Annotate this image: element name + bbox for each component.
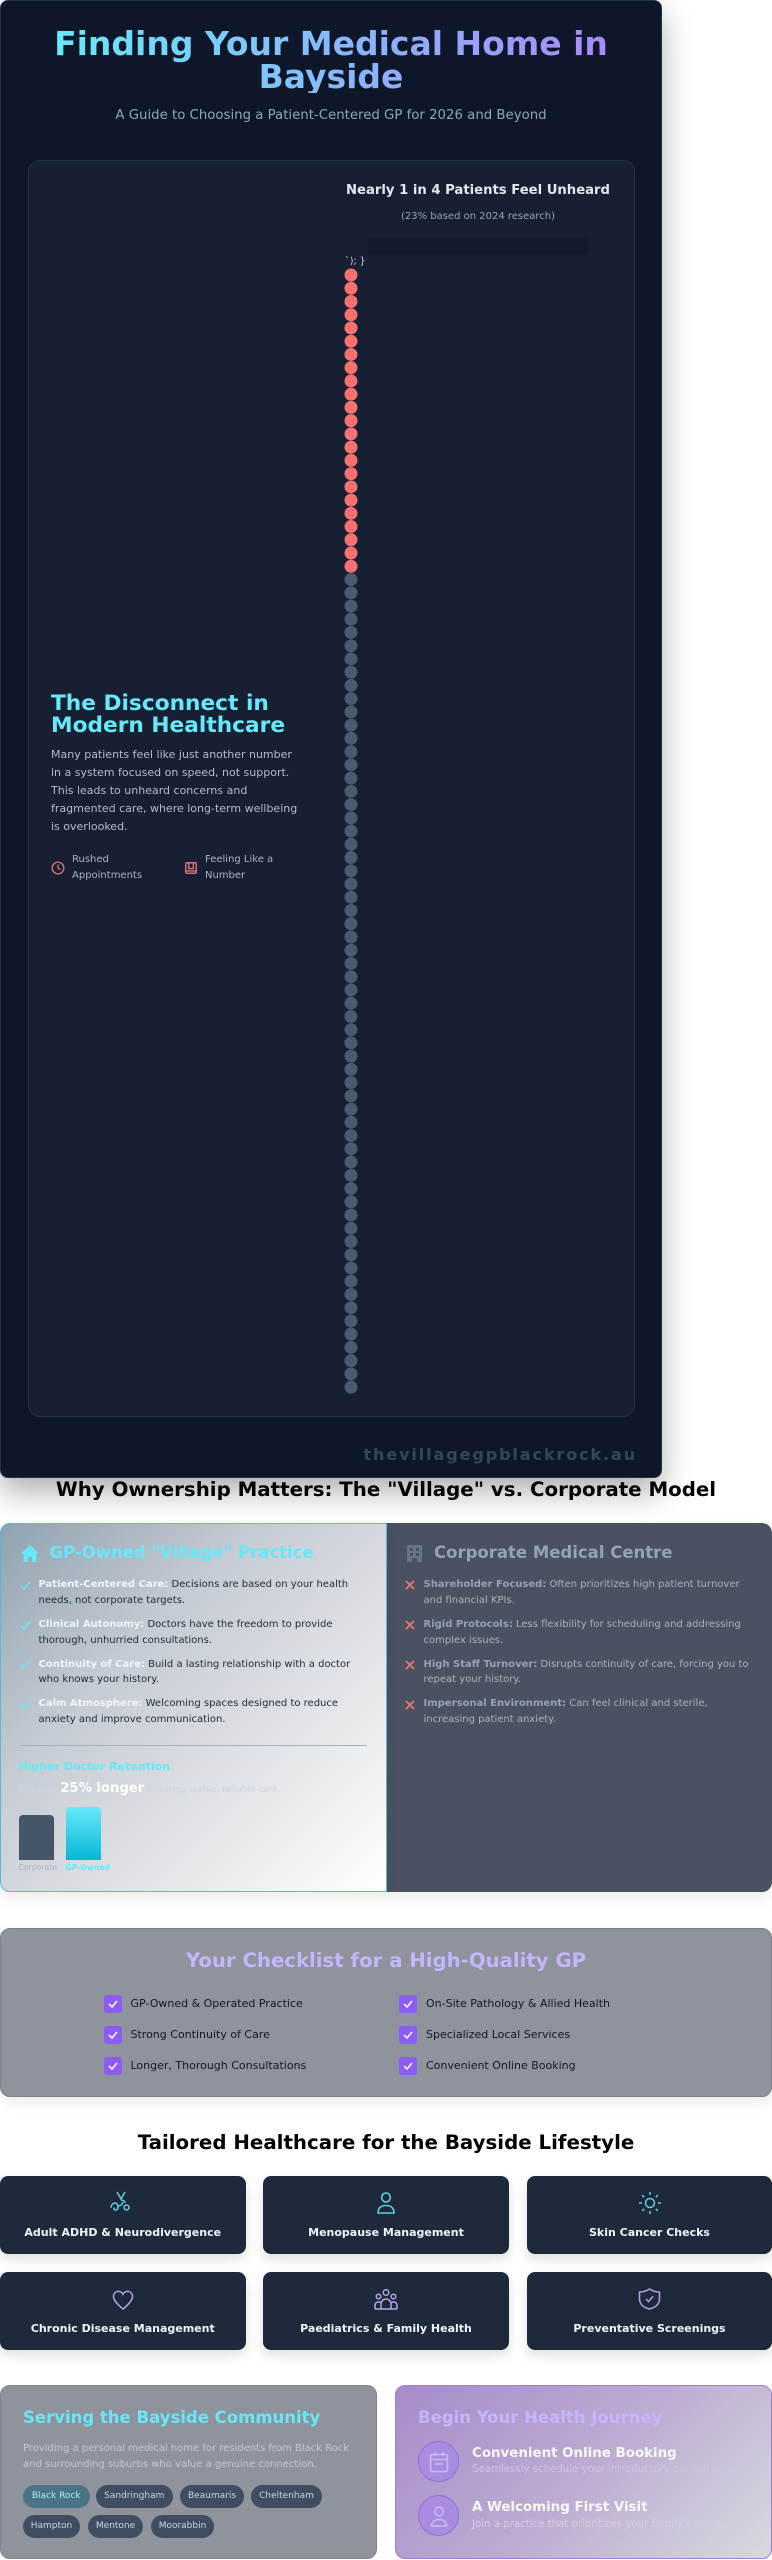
item: rigid protocols: complex issues. xyxy=(424,1634,503,1646)
step: online booking xyxy=(418,2441,758,2483)
icon: family xyxy=(374,2289,398,2310)
tag: Cheltenham xyxy=(251,2485,322,2508)
icon: shield xyxy=(638,2288,661,2310)
list: GP-owned benefits xyxy=(20,1579,350,1724)
item: continuity of care: Continuity of Care: Build a lasting relationship with a doctor xyxy=(38,1658,350,1670)
heading: serving: Serving the Bayside Community xyxy=(23,2408,320,2427)
stray code text: `); } xyxy=(345,256,366,267)
item: patient-centered care: Patient-Centered Care: Decisions are based on your health xyxy=(38,1579,348,1590)
item: shareholder focused: Shareholder Focused: Often prioritizes high patient turnover xyxy=(424,1579,740,1590)
label: skin cancer: Skin Cancer Checks xyxy=(589,2226,710,2239)
checkbox xyxy=(399,2026,417,2044)
tag: Mentone: Mentone xyxy=(96,2521,135,2531)
text: feeling like a number: Number xyxy=(205,870,245,881)
panel: disconnect xyxy=(28,160,634,1417)
heading: GP-owned: GP-Owned "Village" Practice xyxy=(50,1543,314,1562)
text: visit description: Join a practice that prioritizes your family's story. xyxy=(472,2519,722,2530)
tag: Black Rock xyxy=(23,2485,90,2508)
text block: disconnect description: Many patients feel like just another number xyxy=(51,748,292,761)
icon: check xyxy=(20,1582,30,1590)
text: research note: (23% based on 2024 research) xyxy=(401,211,555,222)
step: first visit xyxy=(418,2495,758,2537)
heading: why ownership matters: Why Ownership Matters: The "Village" vs. Corporate Model xyxy=(56,1478,716,1501)
text: feeling like a number: Feeling Like a xyxy=(205,854,273,865)
footer url: thevillagegpblackrock.au xyxy=(363,1445,637,1464)
text: visit title: A Welcoming First Visit xyxy=(472,2500,648,2515)
checkbox xyxy=(399,2056,417,2074)
item: continuity of care: who knows your history. xyxy=(38,1674,159,1685)
item text: Convenient Online Booking xyxy=(426,2058,576,2072)
title: Finding Your Medical Home in xyxy=(54,24,608,63)
item text: Strong Continuity of Care xyxy=(130,2028,270,2041)
icon: cross xyxy=(405,1580,415,1590)
icon: house xyxy=(21,1545,39,1562)
service card: menopause xyxy=(263,2176,509,2254)
title xyxy=(54,27,608,93)
text: community description: Providing a personal medical home for residents from Black Rock xyxy=(23,2443,349,2454)
heading: the disconnect: Modern Healthcare xyxy=(51,713,285,738)
item: shareholder focused: and financial KPIs. xyxy=(424,1594,515,1606)
tag: Moorabbin xyxy=(151,2515,214,2538)
icon: building xyxy=(407,1545,422,1562)
checkbox xyxy=(399,1995,417,2013)
icon: person xyxy=(418,2495,459,2536)
red dots xyxy=(344,275,358,567)
item: high staff turnover: repeat your history. xyxy=(424,1674,521,1685)
bar chart: tenure comparison xyxy=(18,1807,110,1872)
item: patient-centered care xyxy=(38,1579,348,1606)
text block: disconnect description: is overlooked. xyxy=(51,820,128,833)
heading: tailored healthcare: Tailored Healthcare for the Bayside Lifestyle xyxy=(138,2131,634,2154)
item text: GP-Owned & Operated Practice xyxy=(130,1997,303,2010)
text block: disconnect description: in a system focused on speed, not support. xyxy=(51,766,289,779)
text: booking title: Convenient Online Booking xyxy=(472,2446,677,2461)
text: feeling like a number xyxy=(205,854,273,881)
icon: check xyxy=(20,1622,30,1630)
label: GP-owned: GP-Owned xyxy=(66,1863,110,1872)
check item: online booking xyxy=(399,2057,576,2075)
tag: Beaumaris xyxy=(180,2485,244,2508)
item: calm atmosphere: anxiety and improve communication. xyxy=(38,1714,225,1724)
check item: pathology xyxy=(399,1995,610,2013)
text: community description xyxy=(23,2441,349,2472)
panel: serving the community xyxy=(0,2385,377,2559)
label: corporate: Corporate xyxy=(18,1863,57,1872)
item text: Longer, Thorough Consultations xyxy=(130,2058,306,2072)
text: rushed appointments: Appointments xyxy=(72,870,142,881)
heading: nearly 1 in 4: Nearly 1 in 4 Patients Feel Unheard xyxy=(346,183,610,198)
item: calm atmosphere xyxy=(38,1698,338,1724)
divider line xyxy=(18,1744,366,1746)
list: corporate drawbacks xyxy=(405,1579,749,1724)
check item: continuity xyxy=(104,2026,270,2044)
empty dark bar xyxy=(368,237,588,255)
checkbox xyxy=(104,2026,122,2044)
item text: On-Site Pathology & Allied Health xyxy=(426,1997,610,2010)
subtitle: A Guide to Choosing a Patient-Centered GP for 2026 and Beyond xyxy=(115,108,547,123)
panel: hero card xyxy=(0,0,662,1478)
item: continuity of care xyxy=(38,1658,350,1685)
item: clinical autonomy xyxy=(38,1619,332,1646)
text block: disconnect description xyxy=(50,748,297,833)
chart: dot column, 23 highlighted xyxy=(344,268,358,1394)
grey dots xyxy=(344,580,358,1388)
tag: Sandringham: Sandringham xyxy=(104,2491,164,2501)
text: rushed appointments xyxy=(72,854,142,881)
tag: Hampton: Hampton xyxy=(31,2521,72,2531)
service card: chronic disease xyxy=(0,2272,246,2350)
checkbox xyxy=(104,1995,122,2013)
text: booking description: Seamlessly schedule your introductory consultation. xyxy=(472,2464,739,2475)
label: ADHD: Adult ADHD & Neurodivergence xyxy=(24,2226,221,2239)
service card: skin cancer xyxy=(527,2176,772,2254)
item: patient-centered care: needs, not corporate targets. xyxy=(38,1594,185,1606)
item: clinical autonomy: thorough, unhurried consultations. xyxy=(38,1634,212,1646)
text: 25% longer stat: GPs stay 25% longer ensuring stable, reliable care. xyxy=(18,1781,281,1796)
panel: checklist xyxy=(0,1928,772,2097)
tag: Hampton xyxy=(23,2515,80,2538)
heading: higher doctor retention: Higher Doctor Retention xyxy=(18,1760,170,1773)
tag: Moorabbin: Moorabbin xyxy=(159,2521,206,2531)
heading: journey: Begin Your Health Journey xyxy=(418,2408,662,2427)
item: high staff turnover: High Staff Turnover: Disrupts continuity of care, forcing you to xyxy=(424,1658,749,1670)
panel: begin your health journey xyxy=(395,2385,772,2559)
item: impersonal environment: increasing patient anxiety. xyxy=(424,1714,556,1724)
icon: number badge xyxy=(185,862,197,874)
item: impersonal environment xyxy=(424,1698,708,1724)
heading: the disconnect: The Disconnect in xyxy=(51,691,269,716)
check item: local services xyxy=(399,2026,570,2044)
icon: heart xyxy=(112,2290,134,2310)
bar: GP-owned xyxy=(66,1807,100,1860)
icon: check xyxy=(20,1700,30,1709)
service card: preventative xyxy=(527,2272,772,2350)
service card: paediatrics xyxy=(263,2272,509,2350)
item: rigid protocols: Rigid Protocols: Less flexibility for scheduling and addressing xyxy=(424,1619,741,1630)
label: chronic disease: Chronic Disease Management xyxy=(31,2322,215,2335)
title: Bayside xyxy=(259,57,403,96)
check item: GP-owned xyxy=(104,1995,303,2013)
icon: calendar xyxy=(418,2441,459,2482)
label: paediatrics: Paediatrics & Family Health xyxy=(300,2322,472,2335)
heading: checklist: Your Checklist for a High-Quality GP xyxy=(186,1949,586,1972)
icon: cross xyxy=(405,1660,415,1670)
text block: disconnect description: fragmented care, where long-term wellbeing xyxy=(51,802,297,815)
icon: person xyxy=(377,2192,395,2214)
icon: sun xyxy=(639,2192,661,2214)
heading: the disconnect xyxy=(51,691,285,738)
check item: consultations xyxy=(104,2057,306,2075)
item: shareholder focused xyxy=(424,1579,740,1606)
item: impersonal environment: Impersonal Environment: Can feel clinical and sterile, xyxy=(424,1698,708,1709)
text block: disconnect description: This leads to unheard concerns and xyxy=(51,784,247,797)
icon: cross xyxy=(405,1620,415,1630)
tag: Beaumaris: Beaumaris xyxy=(188,2491,236,2501)
label: preventative: Preventative Screenings xyxy=(573,2322,726,2335)
service card: ADHD xyxy=(0,2176,246,2254)
panel: corporate medical centre xyxy=(386,1523,772,1892)
tag: Sandringham xyxy=(96,2485,172,2508)
item: high staff turnover xyxy=(424,1658,749,1685)
checkbox xyxy=(104,2056,122,2074)
text: rushed appointments: Rushed xyxy=(72,854,109,865)
label: menopause: Menopause Management xyxy=(308,2226,464,2239)
icon: cross xyxy=(405,1700,415,1710)
panel: GP-owned village practice xyxy=(0,1523,386,1892)
text: community description: and surrounding suburbs who value a genuine connection. xyxy=(23,2459,317,2470)
tag: Cheltenham: Cheltenham xyxy=(259,2491,314,2501)
tag: Black Rock: Black Rock xyxy=(32,2491,81,2501)
tag: Mentone xyxy=(88,2515,143,2538)
item text: Specialized Local Services xyxy=(426,2028,570,2041)
bar: corporate xyxy=(18,1815,54,1860)
heading: corporate: Corporate Medical Centre xyxy=(434,1543,672,1562)
item: clinical autonomy: Clinical Autonomy: Doctors have the freedom to provide xyxy=(38,1619,332,1630)
icon: check xyxy=(20,1660,30,1669)
icon: ribbon loops xyxy=(110,2192,130,2211)
icon: clock xyxy=(52,862,64,874)
item: rigid protocols xyxy=(424,1619,741,1646)
item: calm atmosphere: Calm Atmosphere: Welcoming spaces designed to reduce xyxy=(38,1698,338,1709)
